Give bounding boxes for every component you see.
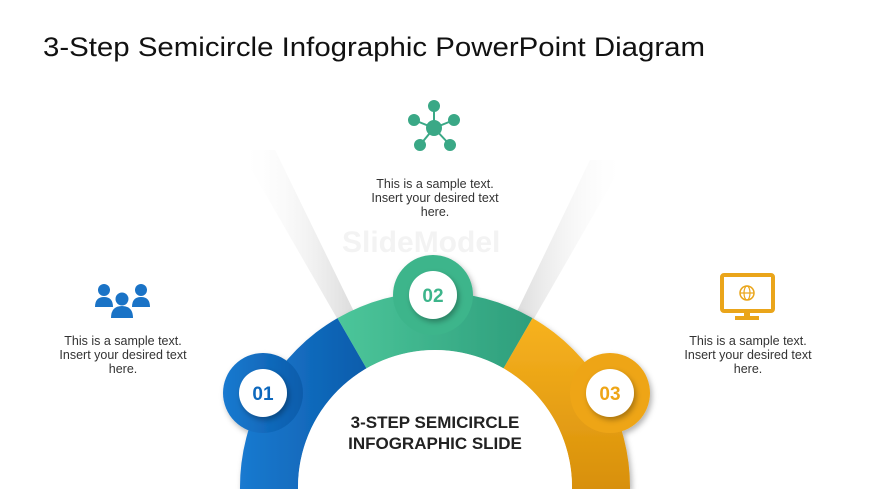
text 03: Insert your desired text [684, 348, 812, 362]
center white circle [298, 350, 572, 489]
segment 03 orange [504, 318, 650, 489]
segment 02 green [338, 255, 532, 368]
icon: network [409, 101, 459, 150]
shadow beam left [240, 150, 362, 328]
badge 01: 01 [252, 384, 274, 405]
icon: monitor globe [722, 275, 773, 320]
text 02: This is a sample text. [376, 177, 494, 191]
center title: 3-STEP SEMICIRCLE [351, 413, 519, 432]
watermark: SlideModel [342, 226, 500, 259]
title: 3-Step Semicircle Infographic PowerPoint Diagram [43, 32, 705, 62]
text 03 [684, 334, 812, 376]
badge 03 [586, 369, 634, 417]
text 01: here. [109, 362, 137, 376]
shadow beam right [508, 160, 625, 330]
badge 02: 02 [422, 286, 444, 307]
text 01 [59, 334, 187, 376]
text 01: Insert your desired text [59, 348, 187, 362]
text 03: This is a sample text. [689, 334, 807, 348]
text 02: Insert your desired text [371, 191, 499, 205]
text 01: This is a sample text. [64, 334, 182, 348]
badge 03: 03 [599, 384, 621, 405]
text 02 [371, 177, 499, 219]
center title: INFOGRAPHIC SLIDE [348, 434, 522, 453]
icon: people [95, 284, 150, 318]
badge 01 [239, 369, 287, 417]
text 03: here. [734, 362, 762, 376]
badge 02 [409, 271, 457, 319]
segment 01 blue [223, 318, 366, 489]
semicircle ring [223, 255, 650, 489]
text 02: here. [421, 205, 449, 219]
center title [348, 413, 522, 453]
